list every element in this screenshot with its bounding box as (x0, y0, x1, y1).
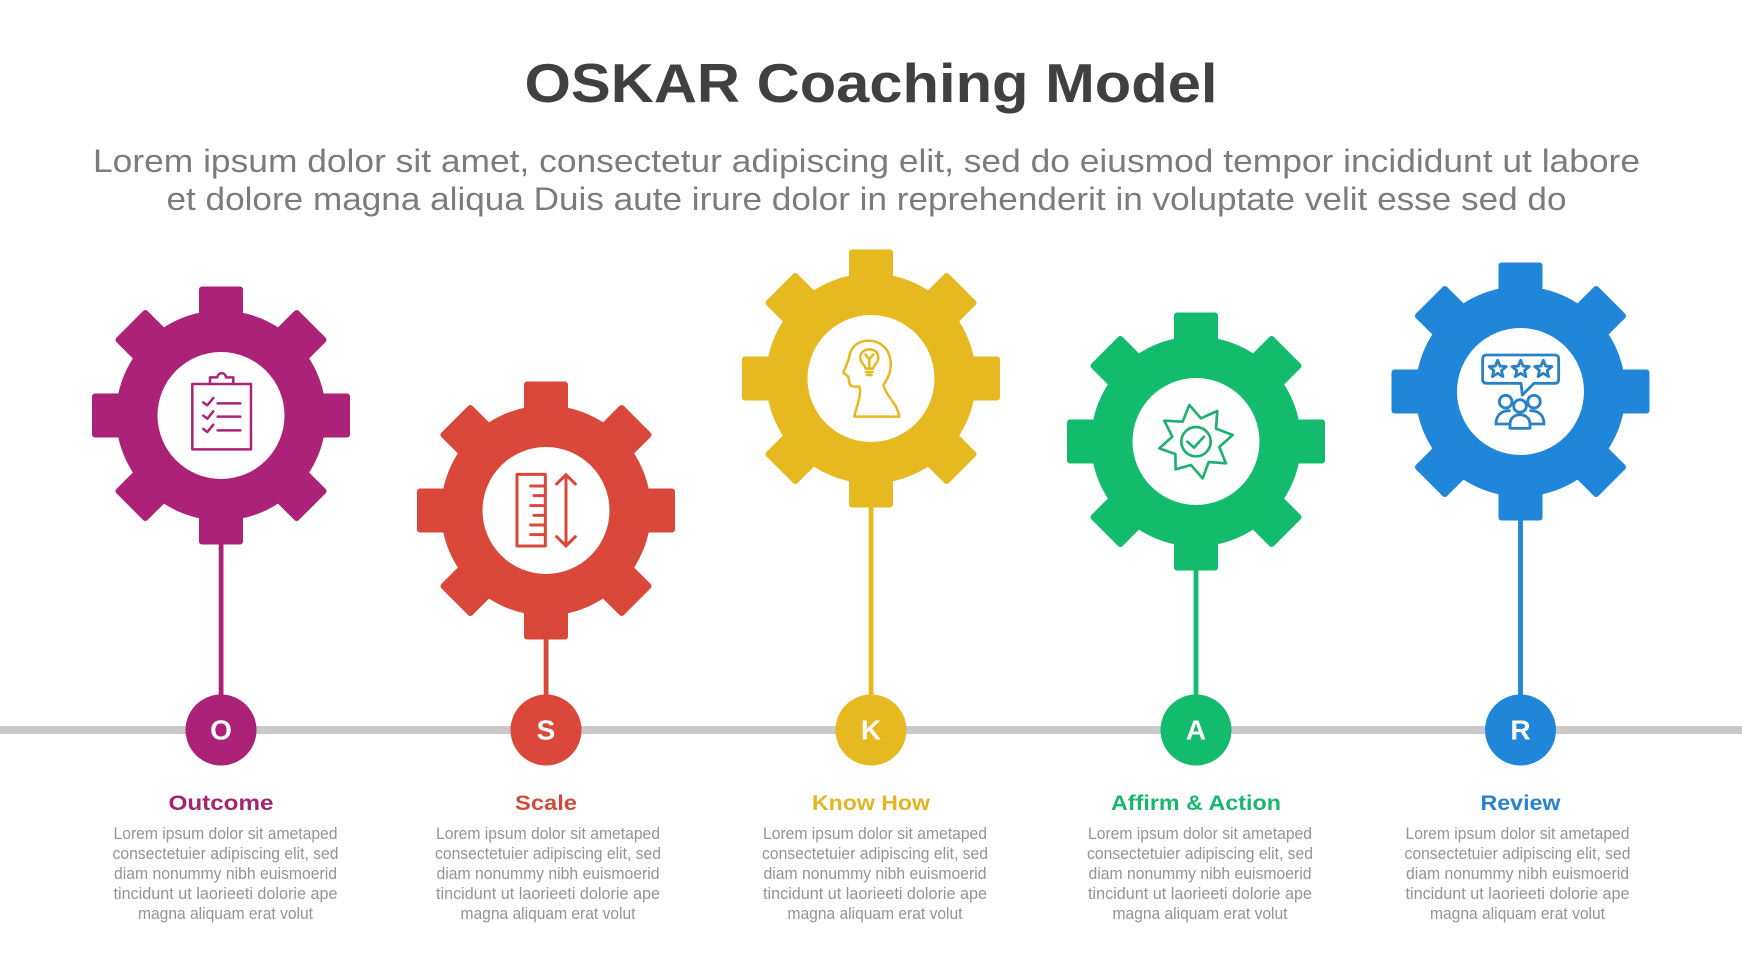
subtitle text: et dolore magna aliqua Duis aute irure dolor in reprehenderit in voluptate velit esse sed do (166, 181, 1566, 217)
text block: Know How: magna aliquam erat volut (788, 905, 963, 923)
connector: Review (1518, 511, 1523, 730)
icon: ruler and arrow (517, 474, 575, 546)
text block: Know How: tincidunt ut laorieeti dolorie ape (763, 885, 987, 903)
gear: Outcome (92, 286, 350, 544)
icon: star rating and people (1483, 355, 1559, 428)
subtitle text: Lorem ipsum dolor sit amet, consectetur adipiscing elit, sed do eiusmod tempor incididunt ut labore (93, 143, 1640, 179)
text block: Scale: diam nonummy nibh euismoerid (436, 865, 660, 883)
text block: Review: tincidunt ut laorieeti dolorie ape (1406, 885, 1630, 903)
text block: Scale: magna aliquam erat volut (460, 905, 636, 923)
marker: A: A (1186, 715, 1206, 746)
panel: Know How (742, 250, 1000, 923)
text block: Review (1404, 825, 1630, 923)
text block: Review: Lorem ipsum dolor sit ametaped (1406, 825, 1630, 843)
text block: Know How: Lorem ipsum dolor sit ametaped (763, 825, 987, 843)
text block: Outcome: tincidunt ut laorieeti dolorie ape (114, 885, 338, 903)
text block: Outcome: magna aliquam erat volut (138, 905, 313, 923)
connector: Know How (869, 498, 874, 730)
gear: Scale (417, 382, 675, 640)
marker: R: R (1510, 715, 1531, 746)
panel: Affirm & Action (1067, 312, 1325, 923)
heading: Scale: Scale (515, 791, 577, 815)
heading: Review: Review (1480, 791, 1561, 815)
subtitle text (93, 143, 1640, 217)
text block: Affirm & Action (1087, 825, 1313, 923)
timeline baseline (0, 726, 1742, 734)
text block: Review: diam nonummy nibh euismoerid (1406, 865, 1629, 883)
text block: Outcome: diam nonummy nibh euismoerid (114, 865, 337, 883)
icon: badge with check (1159, 405, 1233, 478)
panel: Scale (417, 382, 675, 923)
panel: Outcome (92, 286, 350, 923)
text block: Outcome: Lorem ipsum dolor sit ametaped (114, 825, 338, 843)
text block: Outcome (112, 825, 338, 923)
text block: Know How: diam nonummy nibh euismoerid (764, 865, 986, 883)
marker: O (186, 694, 256, 766)
text block: Affirm & Action: magna aliquam erat volut (1112, 905, 1288, 923)
gear: Know How (742, 250, 1000, 508)
heading: Outcome: Outcome (168, 791, 274, 815)
connector: Outcome (219, 530, 224, 730)
icon: head with light bulb (843, 341, 899, 417)
heading: Affirm & Action: Affirm & Action (1111, 791, 1281, 815)
text block: Know How (762, 825, 988, 923)
marker: O: O (210, 715, 232, 746)
text block: Affirm & Action: tincidunt ut laorieeti dolorie ape (1088, 885, 1312, 903)
marker: A (1160, 694, 1232, 766)
marker: K (836, 694, 906, 766)
text block: Scale: Lorem ipsum dolor sit ametaped (436, 825, 660, 843)
text block: Review: consectetuier adipiscing elit, sed (1404, 845, 1630, 863)
title: OSKAR Coaching Model (524, 52, 1218, 114)
panel: Review (1392, 262, 1650, 923)
text block: Outcome: consectetuier adipiscing elit, sed (112, 845, 338, 863)
gear: Affirm & Action (1067, 312, 1325, 570)
heading: Know How: Know How (812, 791, 930, 815)
connector: Affirm & Action (1194, 561, 1198, 730)
text block: Affirm & Action: Lorem ipsum dolor sit ametaped (1088, 825, 1312, 843)
marker: S (510, 694, 582, 766)
text block: Scale (435, 825, 661, 923)
text block: Affirm & Action: diam nonummy nibh euismoerid (1088, 865, 1312, 883)
text block: Know How: consectetuier adipiscing elit, sed (762, 845, 988, 863)
icon: clipboard checklist (192, 373, 251, 449)
marker: R (1485, 694, 1556, 766)
marker: S: S (537, 715, 555, 746)
text block: Scale: tincidunt ut laorieeti dolorie ape (436, 885, 660, 903)
text block: Affirm & Action: consectetuier adipiscing elit, sed (1087, 845, 1313, 863)
text block: Review: magna aliquam erat volut (1430, 905, 1605, 923)
connector: Scale (544, 630, 548, 730)
marker: K: K (861, 715, 881, 746)
text block: Scale: consectetuier adipiscing elit, sed (435, 845, 661, 863)
gear: Review (1392, 262, 1650, 520)
